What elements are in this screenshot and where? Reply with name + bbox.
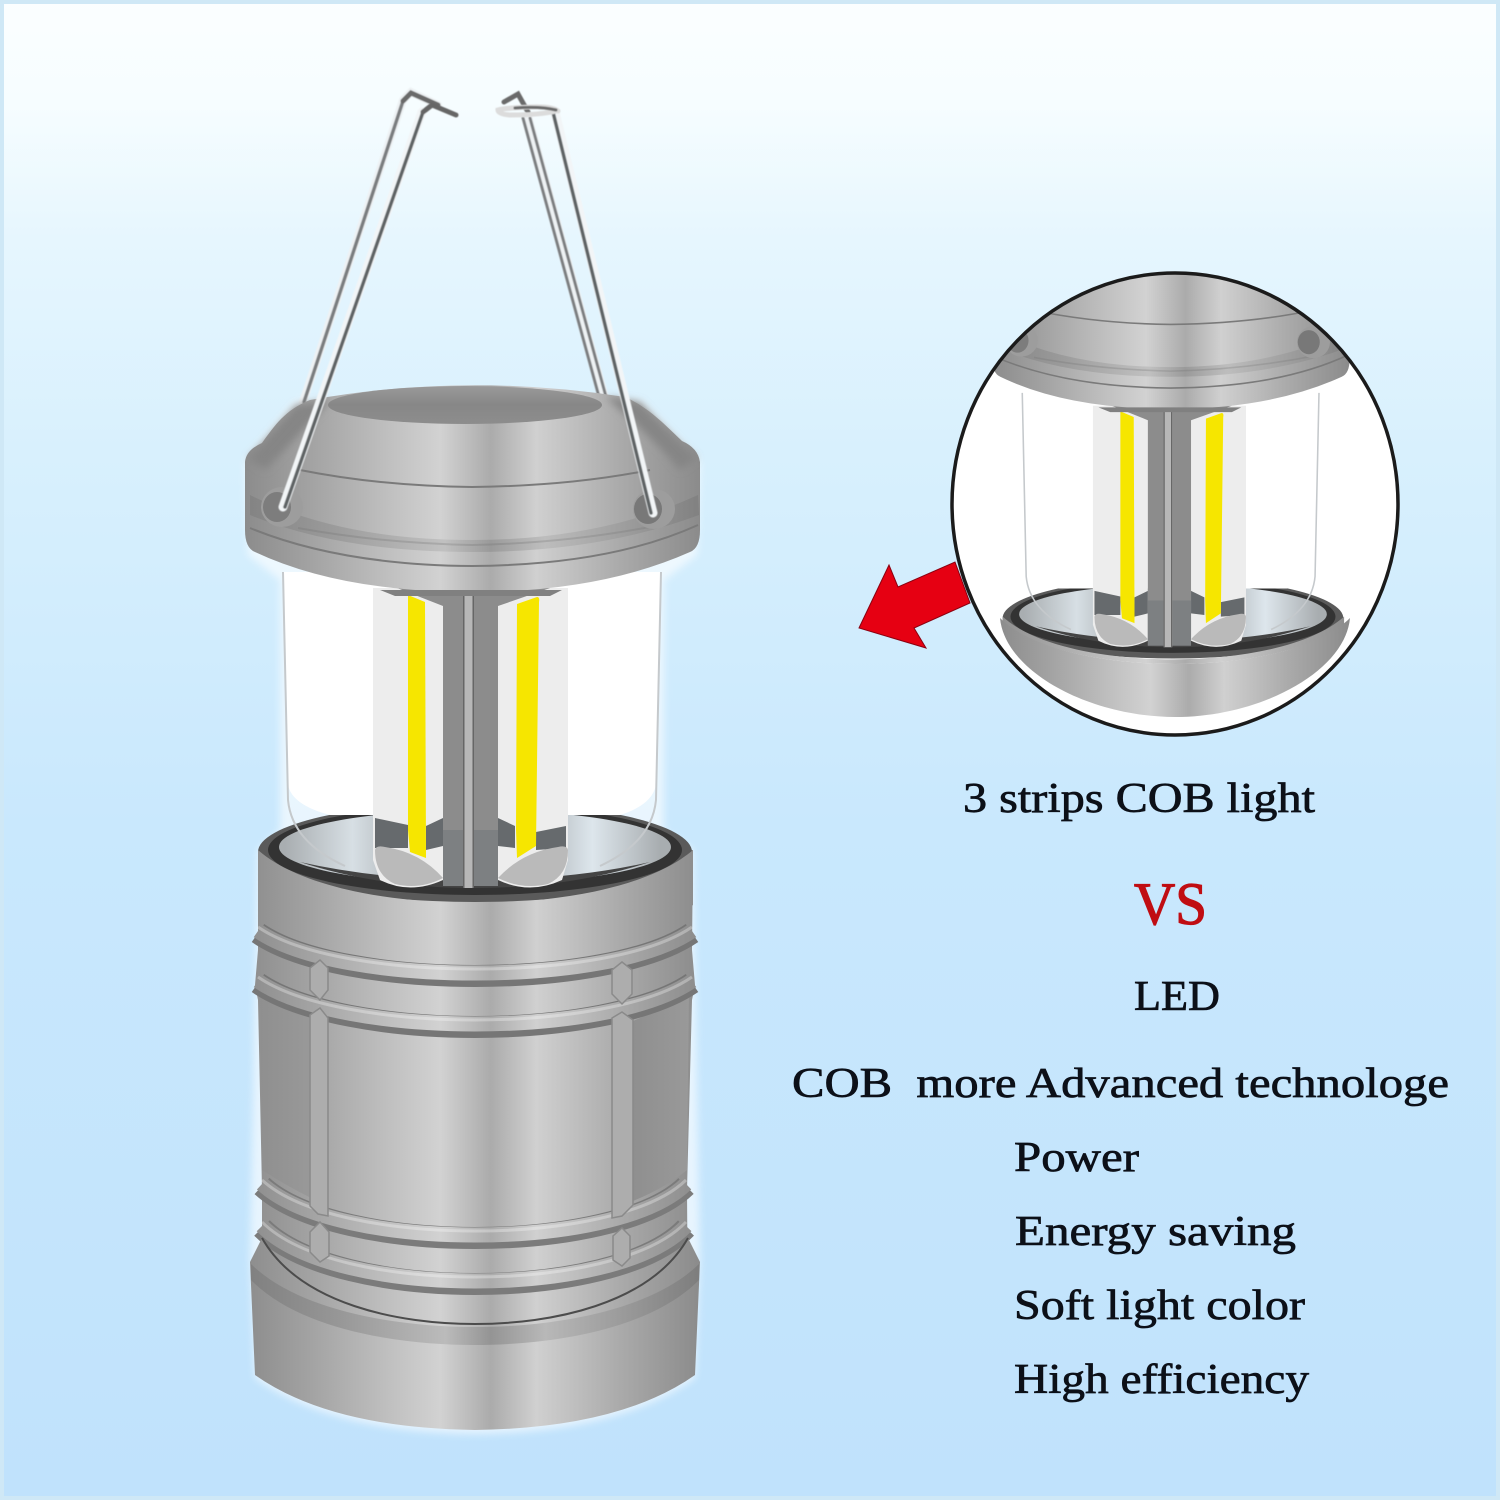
text: COB more Advanced technologe: COB more Advanced technologe <box>792 1061 1449 1107</box>
back handle wires <box>303 92 608 404</box>
right tube <box>498 588 568 888</box>
top cap <box>245 385 700 596</box>
left COB strip <box>408 595 426 858</box>
magnified lens <box>952 242 1398 740</box>
right side panel <box>633 990 689 1201</box>
left side panel <box>260 990 311 1198</box>
lantern head: cap, glass, tubes, COB strips and rim <box>245 385 700 964</box>
left peg <box>261 487 303 527</box>
vertical ribs <box>310 960 633 1266</box>
text: LED: LED <box>1134 974 1220 1020</box>
right peg <box>633 489 675 529</box>
text: High efficiency: High efficiency <box>1014 1357 1309 1403</box>
upper ribs <box>258 927 692 1027</box>
arrow: red pointer from magnifier <box>859 562 970 648</box>
lantern lower body <box>250 850 700 1430</box>
inset lantern detail <box>994 274 1350 664</box>
base ring <box>250 1238 700 1430</box>
right COB strip <box>516 597 539 858</box>
lantern <box>245 92 700 1434</box>
main front panel <box>329 1020 612 1224</box>
text: 3 strips COB light: 3 strips COB light <box>963 776 1315 822</box>
body shell <box>255 850 695 1330</box>
cap shadow edges <box>248 400 330 470</box>
text: VS: VS <box>1134 871 1207 937</box>
lower ribs <box>262 1180 686 1284</box>
inset lower rim <box>1002 630 1344 699</box>
text: Power: Power <box>1014 1135 1139 1181</box>
front handle wires <box>283 105 653 513</box>
text: Energy saving: Energy saving <box>1015 1209 1296 1255</box>
glass cylinder <box>283 572 661 815</box>
body rim <box>258 802 693 964</box>
central column <box>397 588 550 888</box>
left tube <box>373 588 443 888</box>
white glow behind lantern <box>245 400 700 1434</box>
text: Soft light color: Soft light color <box>1014 1283 1305 1329</box>
